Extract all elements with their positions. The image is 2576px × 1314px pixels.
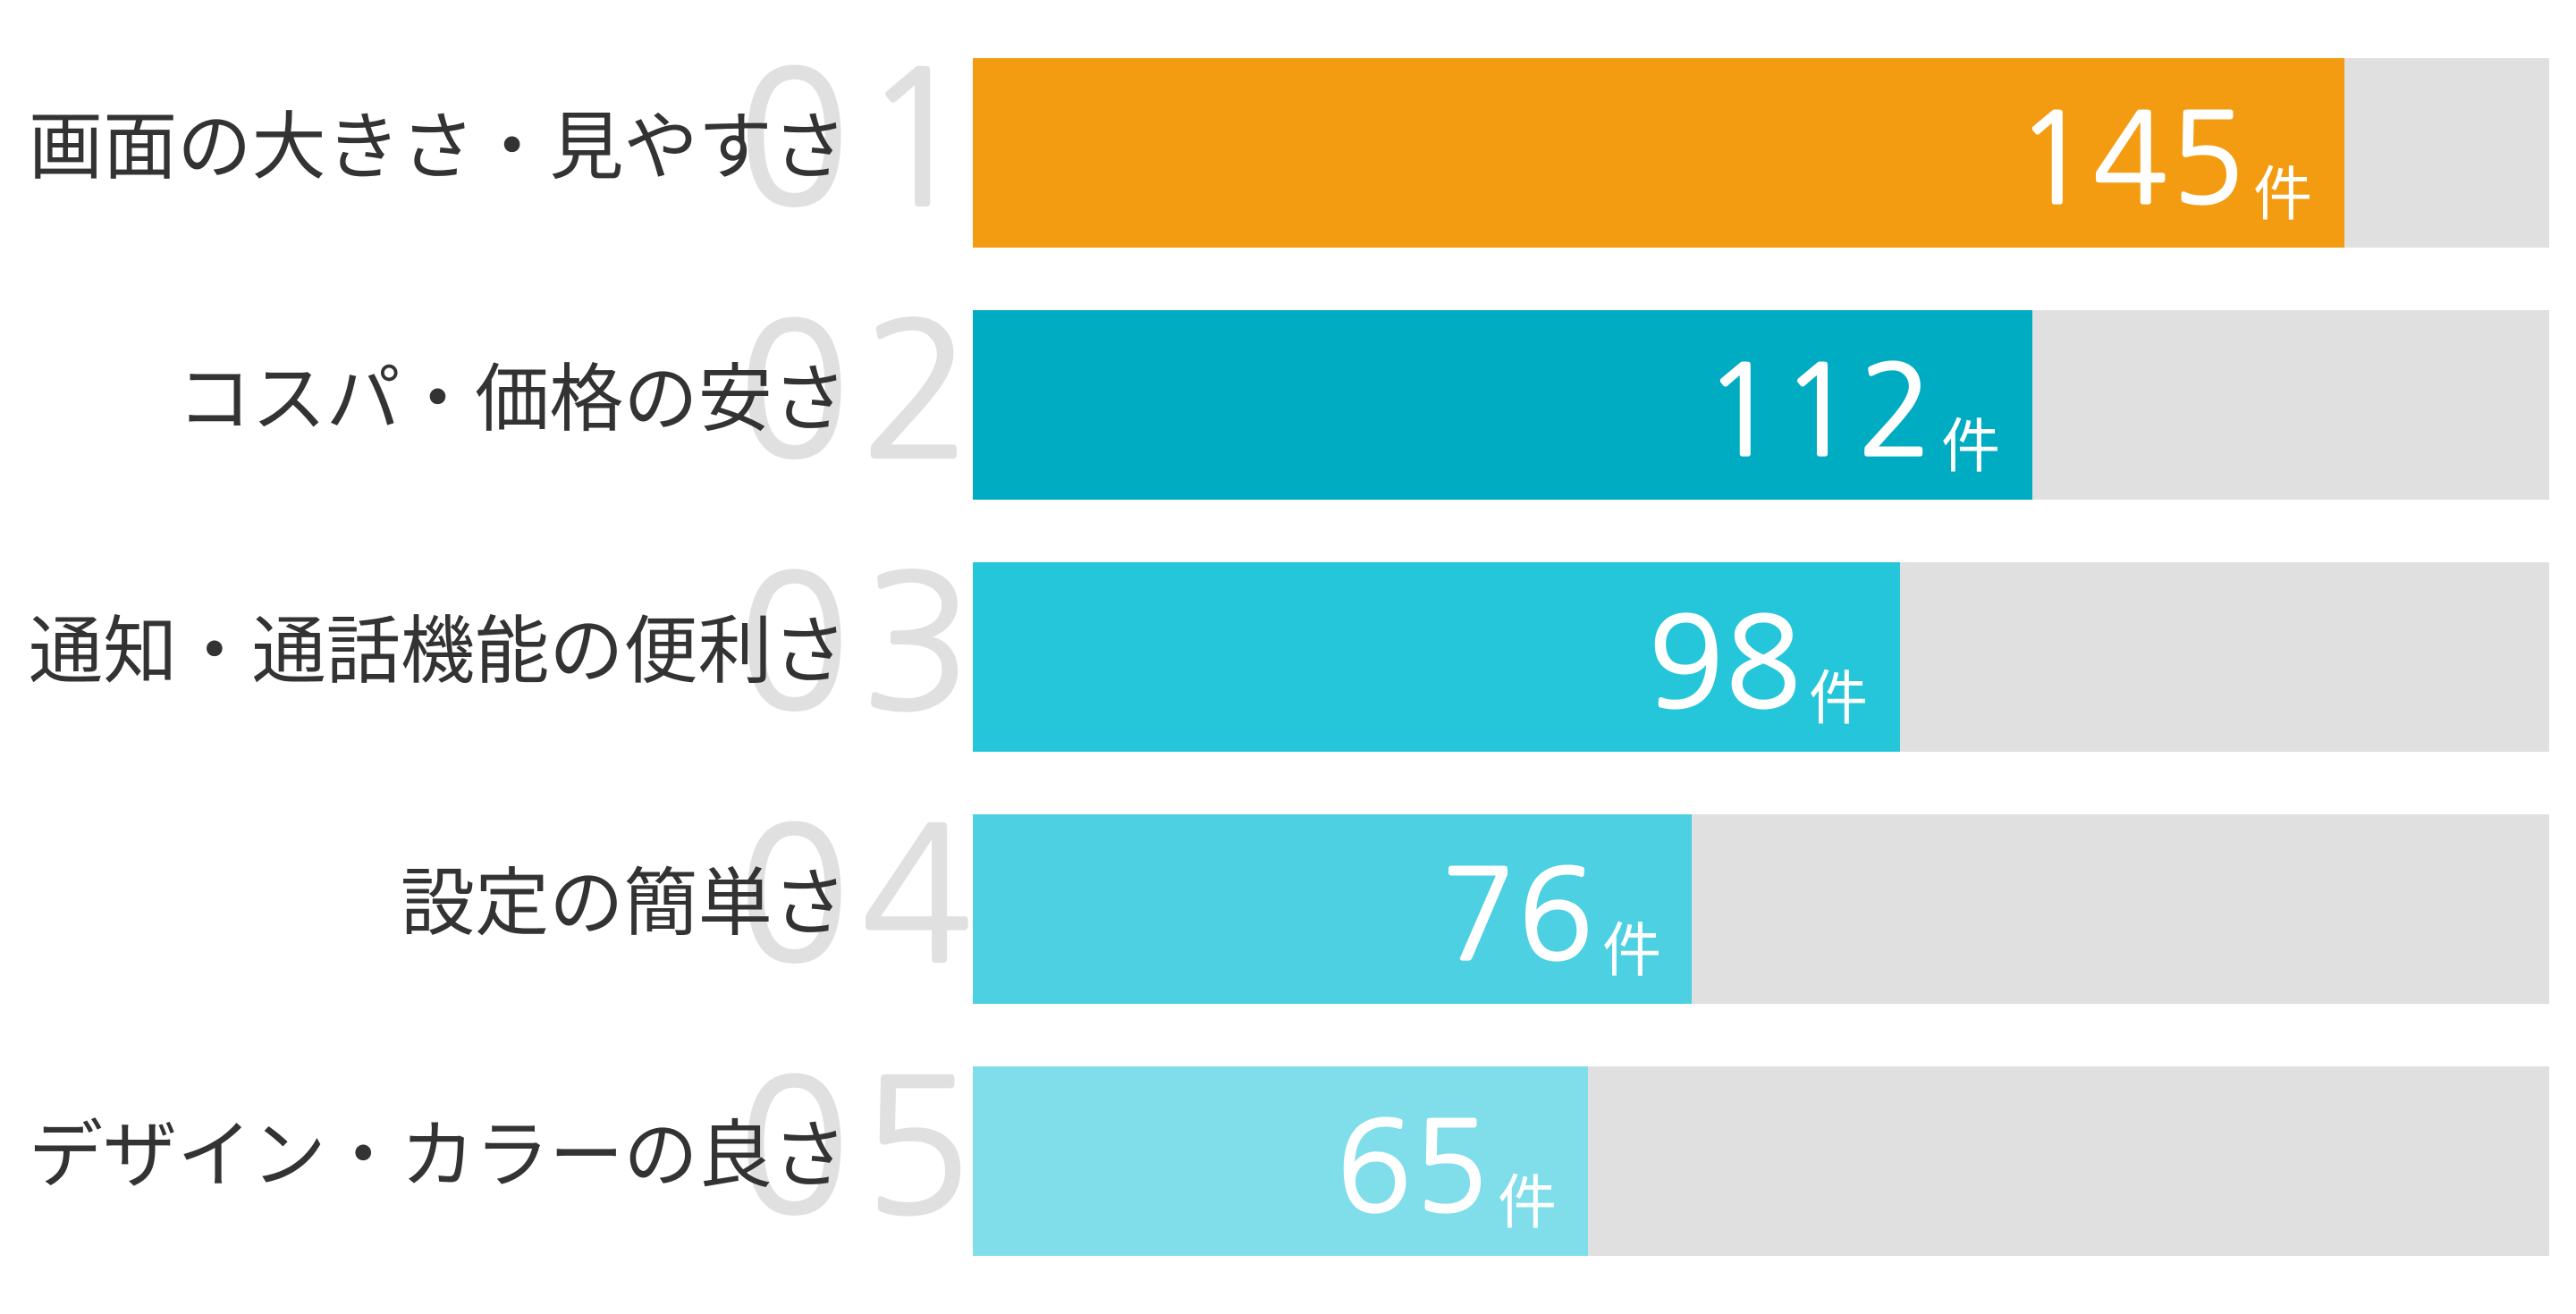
unit: 件 — [1809, 665, 1868, 731]
row 2: cost performance and price — [177, 299, 2549, 500]
bar track — [973, 1066, 2549, 1256]
unit: 件 — [1941, 413, 2000, 479]
unit: 件 — [2253, 161, 2312, 227]
bar value 98 — [973, 562, 1900, 752]
row 4: ease of setup — [401, 803, 2549, 1004]
label: デザイン・カラーの良さ — [29, 1114, 847, 1197]
value 98: 98 — [1649, 602, 1803, 726]
bar value 76 — [973, 814, 1692, 1004]
rank number 01: 01 — [738, 46, 984, 232]
bar value 112 — [973, 310, 2032, 500]
bar value 145 — [973, 58, 2344, 248]
label: 設定の簡単さ — [401, 862, 847, 945]
bar track — [973, 58, 2549, 248]
rank number 03: 03 — [738, 551, 984, 736]
unit: 件 — [1498, 1169, 1557, 1235]
label: コスパ・価格の安さ — [177, 358, 847, 441]
bar track — [973, 310, 2549, 500]
bar value 65 — [973, 1066, 1588, 1256]
row 3: notification and call features — [29, 551, 2549, 752]
value 145: 145 — [2015, 97, 2247, 222]
value 76: 76 — [1441, 854, 1595, 978]
rank number 04: 04 — [738, 803, 984, 988]
rank number 05: 05 — [738, 1055, 984, 1240]
bar track — [973, 562, 2549, 752]
label: 画面の大きさ・見やすさ — [29, 105, 847, 189]
row 5: design and color — [29, 1055, 2549, 1256]
unit: 件 — [1602, 917, 1661, 983]
value 65: 65 — [1337, 1106, 1491, 1230]
row 1: screen size and visibility — [29, 46, 2549, 248]
value 112: 112 — [1703, 350, 1935, 474]
bar track — [973, 814, 2549, 1004]
label: 通知・通話機能の便利さ — [29, 610, 847, 693]
rank number 02: 02 — [738, 299, 984, 484]
